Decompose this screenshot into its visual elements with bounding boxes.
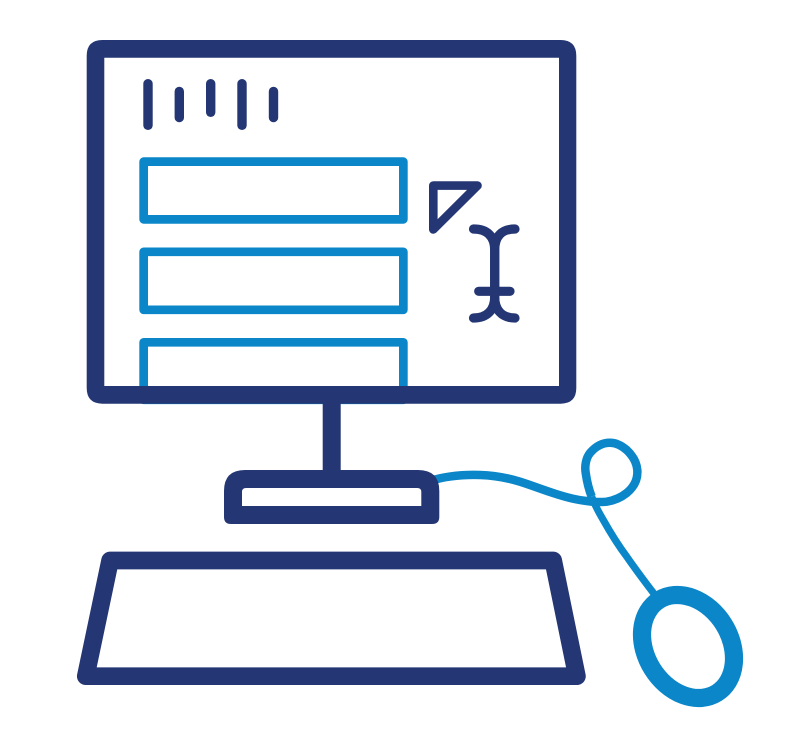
keyboard <box>86 560 577 676</box>
text ticks <box>148 84 274 125</box>
monitor stand neck <box>323 403 341 473</box>
icon: mouse <box>623 578 753 715</box>
mouse cable <box>430 443 655 595</box>
form field 2 <box>144 252 403 310</box>
monitor frame <box>87 40 576 404</box>
icon: triangle cursor <box>433 186 478 230</box>
form field 1 <box>144 162 403 219</box>
form field 3 <box>144 342 403 400</box>
icon: text cursor <box>474 229 515 318</box>
monitor stand base <box>224 470 439 524</box>
